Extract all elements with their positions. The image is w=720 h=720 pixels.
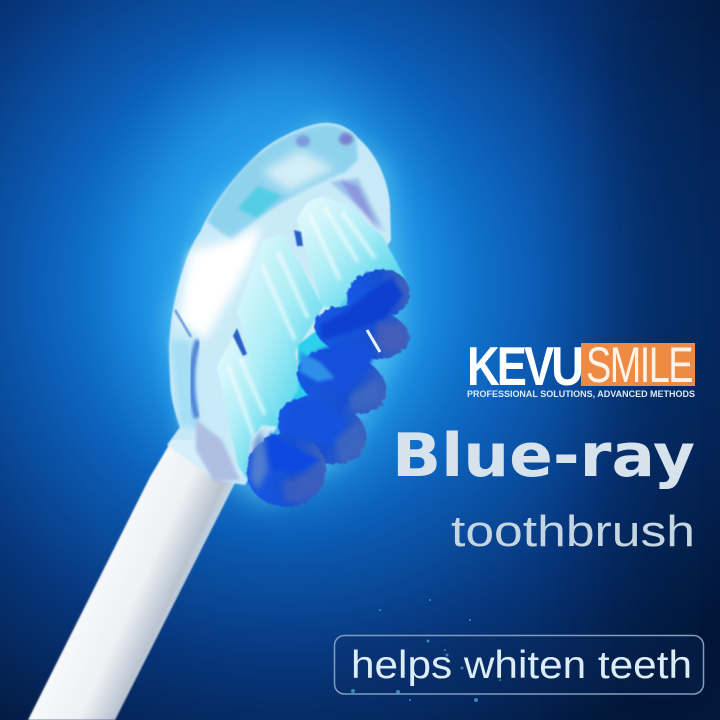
bristle tufts, blue tips (246, 263, 415, 507)
head glow (165, 118, 405, 505)
logo: Kevu Smile (467, 335, 695, 400)
toothbrush handle (28, 440, 240, 720)
bristle streaks (228, 208, 375, 440)
subheading: toothbrush: toothbrush (451, 507, 695, 556)
logo tagline: PROFESSIONAL SOLUTIONS, ADVANCED METHODS (467, 389, 695, 400)
logo word KEVU: KEVU (467, 335, 582, 397)
callout: helps whiten teeth: helps whiten teeth (351, 644, 692, 687)
heading: Blue-ray: Blue-ray (392, 421, 695, 491)
tuft 3 (217, 337, 280, 480)
dark tuft gaps (233, 230, 303, 356)
sparkle particles (351, 599, 501, 702)
blue lobes (246, 263, 415, 507)
dull tuft ends (250, 322, 405, 503)
bristle tufts, white-cyan (217, 197, 407, 480)
white bristle highlight (367, 330, 380, 352)
cyan glow between tufts (276, 320, 340, 425)
tuft 1 (297, 197, 407, 310)
cyan reflections in tips (300, 352, 335, 382)
logo orange box (581, 343, 695, 386)
callout: helps whiten teeth (334, 636, 704, 694)
saturated blue patches (320, 278, 403, 340)
tuft 2 (237, 233, 323, 427)
toothbrush head shell (167, 123, 391, 485)
